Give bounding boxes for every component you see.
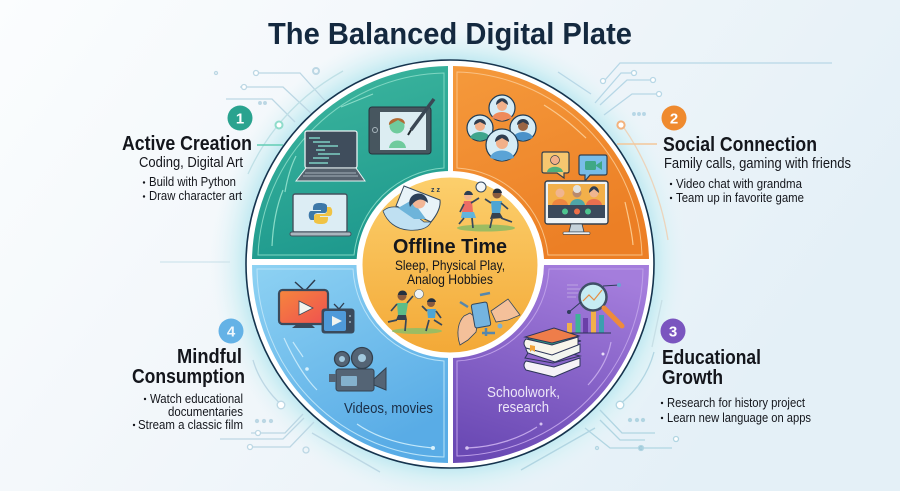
list: mindful consumption: Stream a classic film xyxy=(138,417,243,432)
icon: laptop with python logo xyxy=(290,194,351,236)
heading: social connection: Social Connection xyxy=(663,134,817,156)
list: social connection xyxy=(670,176,804,205)
heading: offline time: Offline Time xyxy=(393,236,507,258)
heading: educational growth: Educational xyxy=(662,347,761,369)
subtitle: active creation: Coding, Digital Art xyxy=(139,155,243,171)
text: schoolwork, research: research xyxy=(498,399,549,416)
title: The Balanced Digital Plate xyxy=(268,16,632,51)
list: active creation: Draw character art xyxy=(149,188,242,203)
badge 4: 4 xyxy=(227,324,236,340)
icon: television xyxy=(279,280,328,328)
badge 1: 1 xyxy=(236,110,244,128)
list: educational growth xyxy=(661,395,811,425)
section: mindful consumption xyxy=(132,318,245,432)
heading: mindful consumption xyxy=(132,346,245,388)
heading: active creation: Active Creation xyxy=(122,133,252,155)
icon: drawing tablet xyxy=(369,99,434,154)
text: offline time description: Sleep, Physical Play, xyxy=(395,257,505,273)
circuit decoration right top xyxy=(558,63,832,240)
icon: small television xyxy=(322,303,354,334)
icon: bar chart with magnifier xyxy=(565,283,622,333)
list: mindful consumption xyxy=(133,391,243,432)
icon: laptop with code xyxy=(296,131,365,181)
badge 3 xyxy=(660,318,686,344)
icon: group of people avatars xyxy=(467,95,536,161)
heading: mindful consumption: Consumption xyxy=(132,366,245,388)
icon: chat bubble person xyxy=(542,152,569,178)
heading: educational growth xyxy=(662,347,761,389)
badge 2: 2 xyxy=(670,110,678,128)
background glow xyxy=(210,24,690,491)
icon: video call monitor xyxy=(545,181,608,234)
badge 3: 3 xyxy=(669,324,677,340)
list: mindful consumption: Watch educational xyxy=(150,391,243,406)
icon: sleeping child xyxy=(383,186,440,230)
icon: sleeping child: z z xyxy=(431,187,440,194)
panel: active creation quadrant xyxy=(252,66,448,259)
icon: stack of books xyxy=(524,328,581,377)
icon: children playing ball xyxy=(388,290,442,334)
list: social connection: Video chat with grandma xyxy=(676,176,803,191)
subtitle: social connection: Family calls, gaming with friends xyxy=(664,156,851,172)
panel: educational growth quadrant xyxy=(453,265,649,463)
panel: mindful consumption quadrant xyxy=(252,265,448,463)
text: videos, movies: Videos, movies xyxy=(344,400,433,417)
circuit decoration right bottom xyxy=(521,300,678,470)
list: educational growth: Research for history project xyxy=(667,395,805,410)
icon: film camera xyxy=(329,348,386,391)
icon: hands repairing gadget xyxy=(458,293,520,345)
text: schoolwork, research: Schoolwork, xyxy=(487,384,560,401)
panel: offline time centre xyxy=(356,171,544,358)
section: educational growth xyxy=(660,318,811,425)
panel: social connection quadrant xyxy=(453,66,649,259)
icon: video camera bubble xyxy=(579,155,607,181)
list: active creation: Build with Python xyxy=(149,174,236,189)
section: social connection xyxy=(662,106,851,205)
text: schoolwork, research xyxy=(487,384,560,416)
list: active creation xyxy=(143,174,242,203)
list: mindful consumption: documentaries xyxy=(168,404,243,419)
heading: mindful consumption: Mindful xyxy=(177,346,242,368)
text: offline time description: Analog Hobbies xyxy=(407,271,493,287)
balanced plate diagram xyxy=(246,60,654,468)
circuit decoration left top xyxy=(214,68,343,174)
section: active creation xyxy=(122,106,252,203)
text: offline time description xyxy=(395,257,505,287)
icon: children playing football xyxy=(457,182,515,232)
circuit decoration left bottom xyxy=(160,262,380,472)
list: educational growth: Learn new language on apps xyxy=(667,410,811,425)
badge 2 xyxy=(662,106,686,130)
list: social connection: Team up in favorite game xyxy=(676,190,804,205)
heading: educational growth: Growth xyxy=(662,367,723,389)
